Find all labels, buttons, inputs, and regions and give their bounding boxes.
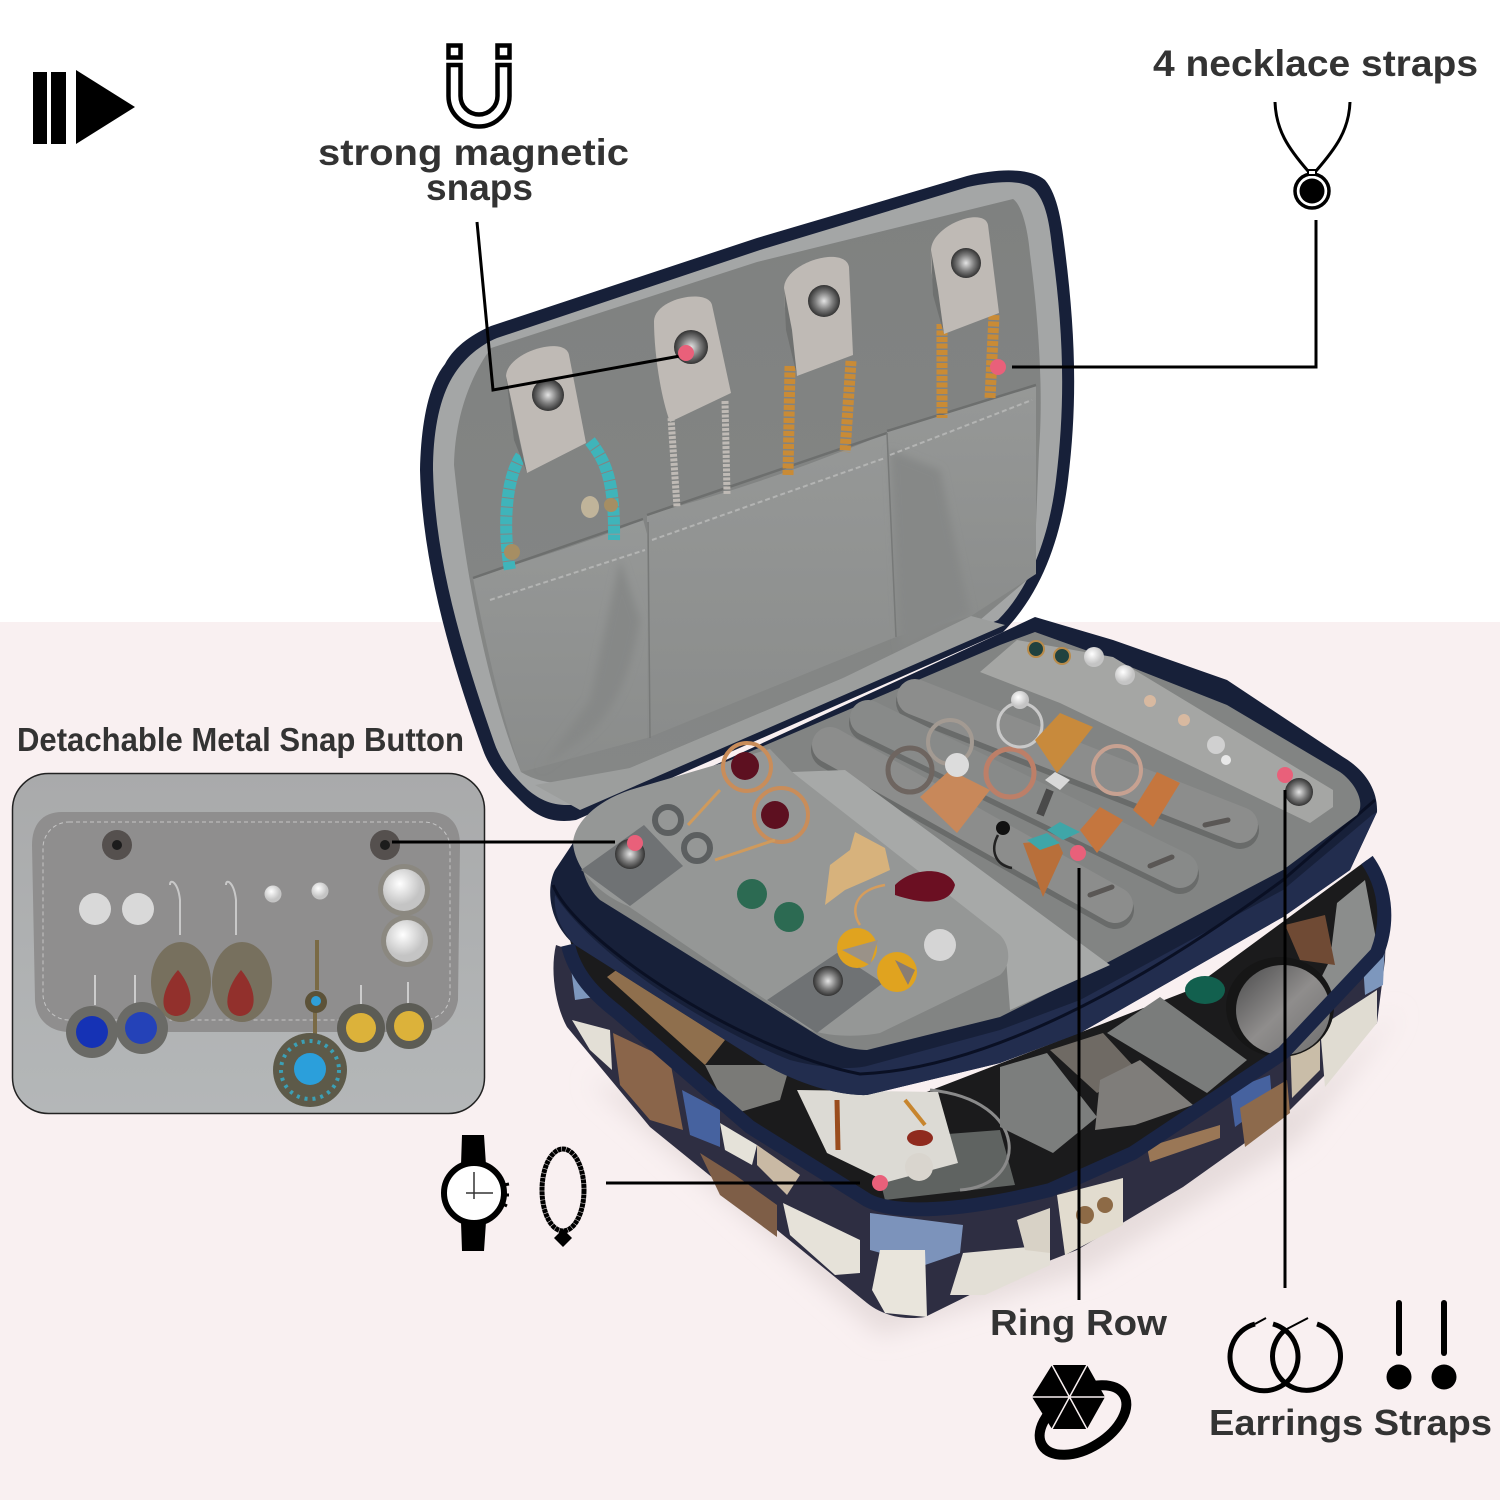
blue earrings [66,975,168,1058]
leather tab 1 [506,346,586,473]
crystal studs [79,893,154,925]
pillow back [1107,997,1247,1093]
red owl earrings [151,882,272,1022]
heading: Earrings Straps: Earrings Straps [1209,1402,1492,1443]
turquoise pendant earring [273,940,347,1107]
zipper compartment [792,770,1110,1010]
callout dots [627,345,1293,1191]
shadow under bag [590,1010,1400,1335]
icon: strap studs [1386,1300,1456,1390]
pillow front [1000,1053,1097,1153]
yellow earrings [837,928,917,992]
green leaf earrings [737,879,804,932]
icon: play pause [33,70,135,144]
roll shadows [830,702,1240,910]
ruby earring [895,871,955,902]
icon: necklace [1275,102,1350,208]
bangle [930,1090,1009,1190]
roll slots [1090,820,1228,895]
icon: hoop earrings [1230,1318,1341,1391]
velvet right [1300,880,1378,1020]
bag: lid [420,170,1074,821]
pocket 3 [887,385,1036,637]
snap tab upper [581,825,683,906]
rings [888,691,1180,897]
wooden jewelry sticks [607,960,725,1065]
pocket 2 [647,433,896,738]
heading: 4 necklace straps: 4 necklace straps [1153,43,1478,84]
leather tab 3 [784,257,853,376]
fabric patches [570,940,1385,1317]
lid lining band [433,182,1062,805]
panel: detachable earring pad inset [12,774,484,1114]
heading: Detachable Metal Snap Button: Detachable Metal Snap Button [17,721,464,758]
leather tab 2 [654,296,731,422]
turquoise bracelet [504,441,618,570]
studs on strap [1028,641,1313,806]
icon: watch [444,1135,509,1251]
lower zipper [568,860,1384,1209]
icon: diamond ring [1027,1365,1139,1469]
earring pad [573,749,1008,1036]
upper tray rim [550,617,1377,1095]
gold hoop earrings [655,743,808,861]
silver crystal brooch [1095,1060,1193,1130]
tray interior [570,860,1384,1209]
leather tab 4 [931,217,999,334]
flamingo earrings [825,832,890,905]
tray floor [870,1130,1015,1200]
silver necklace [671,401,727,507]
yellow earrings [337,982,432,1052]
crystal stud [924,929,956,961]
pocket stitching [490,400,1032,600]
callout lines [392,220,1316,1300]
velvet floor [581,632,1360,1050]
gold necklace 3 [788,361,851,475]
bag: upper tray [550,617,1377,1095]
lid velvet back [454,199,1041,783]
large pearl earrings [378,864,433,967]
icon: magnet [448,46,510,126]
gold necklace 4 [942,315,994,418]
heading: strong magnetic snaps: snaps [426,167,533,208]
velvet pad [32,812,460,1032]
rhinestone bracelet [1050,1033,1137,1093]
heading: Ring Row: Ring Row [990,1302,1168,1343]
small pearls [264,882,328,902]
pocket folds [473,385,1036,578]
pocket shading [540,450,970,770]
snap buttons [102,830,400,860]
green gem ring [1185,976,1225,1004]
snap tab lower [767,953,883,1033]
lid hinge band [535,616,1005,810]
ring rolls [830,697,1240,910]
printed fabric body [553,900,1387,1318]
bag: lower tray [553,860,1387,1318]
earring card [797,1090,958,1182]
pocket 1 [473,519,651,772]
rim herringbone band [555,812,1377,1095]
zipper highlight [553,800,1375,1074]
pillow left [705,1065,790,1115]
heading: strong magnetic snaps [318,132,629,208]
heading: strong magnetic snaps: strong magnetic [318,132,629,173]
icon: bead necklace [542,1149,584,1247]
lid zipper outer edge [420,170,1074,821]
watch [1226,915,1335,1057]
earring strap right [980,640,1333,823]
